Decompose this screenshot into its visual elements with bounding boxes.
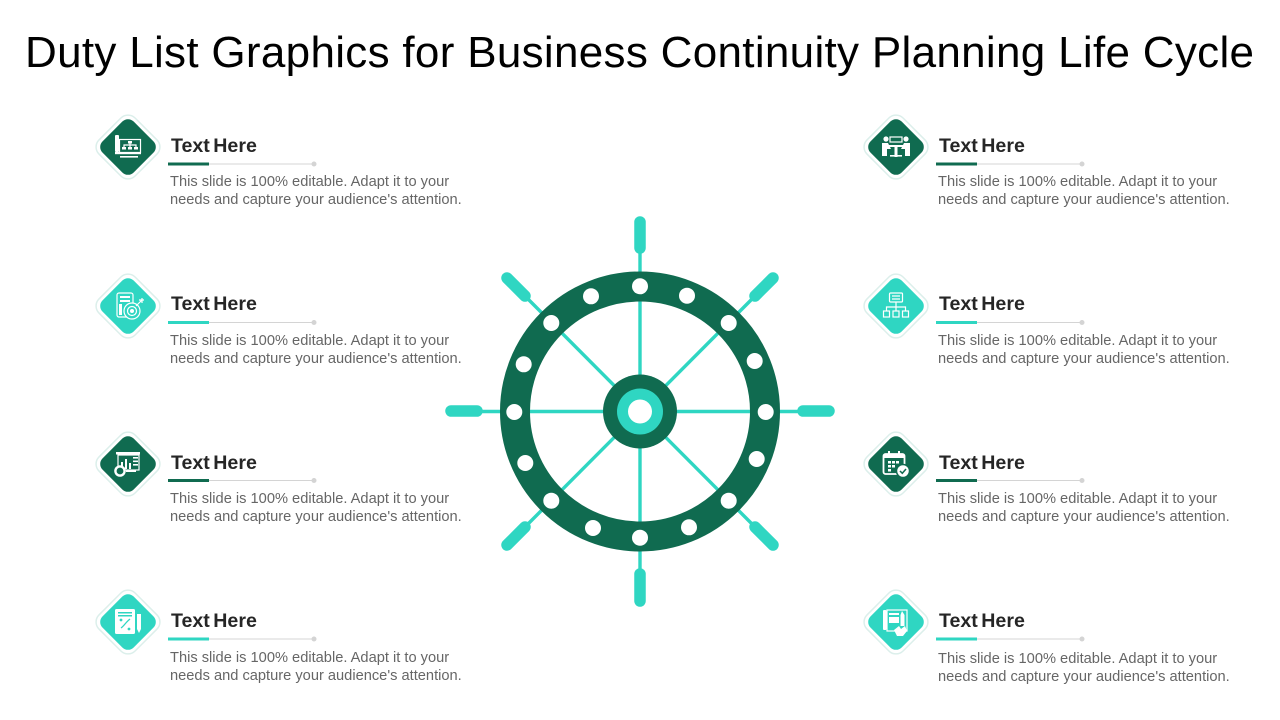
divider — [168, 162, 316, 166]
panel: right item 3 — [860, 428, 1230, 525]
icon: strategy notebook and pencil — [92, 586, 164, 658]
divider — [168, 320, 316, 325]
icon: blueprint org chart — [92, 111, 164, 183]
wheel handles — [451, 222, 829, 601]
heading: Text Here — [171, 452, 257, 474]
body text: This slide is 100% editable. Adapt it to your — [938, 651, 1217, 667]
divider — [168, 636, 316, 642]
body text: This slide is 100% editable. Adapt it to your — [938, 491, 1217, 507]
wheel rim — [515, 286, 765, 536]
panel: left item 3 — [92, 428, 462, 525]
body text: needs and capture your audience's attention. — [938, 351, 1230, 367]
divider — [936, 478, 1084, 483]
body text: needs and capture your audience's attention. — [170, 668, 462, 684]
panel: left item 4 — [92, 586, 462, 684]
heading: Text Here — [171, 293, 257, 315]
heading: Text Here — [939, 610, 1025, 632]
ship wheel chart — [451, 222, 829, 601]
body text: needs and capture your audience's attention. — [938, 509, 1230, 525]
heading: Text Here — [171, 135, 257, 157]
body text: needs and capture your audience's attention. — [170, 351, 462, 367]
panel: right item 1 — [860, 111, 1230, 208]
icon: hierarchy — [860, 270, 932, 342]
body text: needs and capture your audience's attention. — [938, 669, 1230, 685]
wheel hub — [603, 374, 677, 448]
body text: This slide is 100% editable. Adapt it to your — [938, 333, 1217, 349]
body text: This slide is 100% editable. Adapt it to your — [170, 333, 449, 349]
heading: Text Here — [939, 452, 1025, 474]
divider — [168, 478, 316, 483]
heading: Text Here — [939, 293, 1025, 315]
heading: Text Here — [939, 135, 1025, 157]
divider — [936, 162, 1084, 166]
icon: blueprint and tools — [860, 586, 932, 658]
heading: Text Here — [171, 610, 257, 632]
panel: left item 1 — [92, 111, 462, 208]
divider — [936, 320, 1084, 325]
body text: needs and capture your audience's attention. — [170, 192, 462, 208]
panel: right item 2 — [860, 270, 1230, 367]
panel: left item 2 — [92, 270, 462, 367]
icon: calendar with check — [860, 428, 932, 500]
icon: chart board and gear — [92, 428, 164, 500]
body text: This slide is 100% editable. Adapt it to your — [170, 491, 449, 507]
body text: This slide is 100% editable. Adapt it to your — [170, 174, 449, 190]
body text: This slide is 100% editable. Adapt it to your — [170, 650, 449, 666]
icon: meeting at table — [860, 111, 932, 183]
title: Duty List Graphics for Business Continuity Planning Life Cycle — [25, 28, 1254, 77]
body text: This slide is 100% editable. Adapt it to your — [938, 174, 1217, 190]
icon: document and target — [92, 270, 164, 342]
body text: needs and capture your audience's attention. — [170, 509, 462, 525]
rim holes — [506, 278, 774, 546]
panel: right item 4 — [860, 586, 1230, 685]
divider — [936, 636, 1084, 642]
body text: needs and capture your audience's attention. — [938, 192, 1230, 208]
